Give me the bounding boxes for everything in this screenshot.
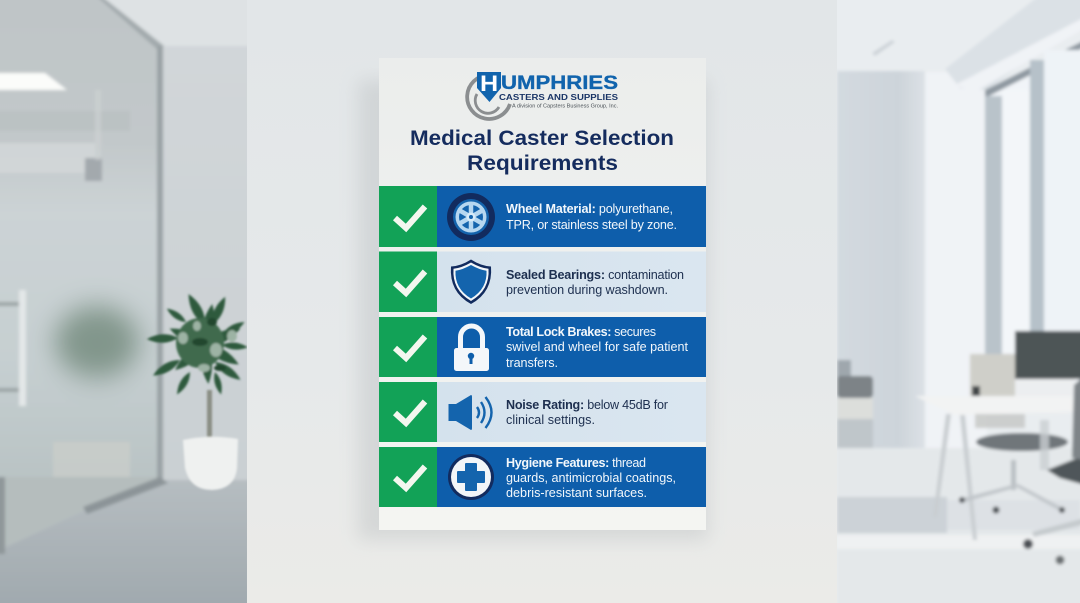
text: sealed bearings: Sealed Bearings: contamination <box>506 268 684 282</box>
logo: Humphries Casters and Supplies: UMPHRIES <box>501 73 618 94</box>
title: Requirements <box>467 152 618 175</box>
row: hygiene features <box>379 447 706 507</box>
logo: Humphries Casters and Supplies: A division of Capsters Business Group, Inc. <box>512 104 618 110</box>
icon: speaker <box>448 395 492 430</box>
text: noise rating <box>506 398 668 427</box>
logo: Humphries Casters and Supplies: H <box>480 72 498 97</box>
plant in white pot <box>147 292 248 490</box>
text: noise rating: clinical settings. <box>506 413 595 427</box>
row: noise rating <box>379 382 706 442</box>
text: sealed bearings <box>506 268 684 297</box>
title <box>410 127 674 175</box>
background: bright office on the right <box>835 0 1080 603</box>
poster panel <box>379 58 706 530</box>
icon: check mark <box>395 402 425 423</box>
text: sealed bearings: prevention during washdown. <box>506 283 668 297</box>
icon: padlock <box>454 326 489 371</box>
text: total lock brakes: transfers. <box>506 356 558 370</box>
icon: medical cross <box>448 454 494 500</box>
logo: Humphries Casters and Supplies: CASTERS AND SUPPLIES <box>499 92 618 102</box>
text: hygiene features: debris-resistant surfaces. <box>506 486 647 500</box>
icon: check mark <box>395 206 425 228</box>
row: wheel material <box>379 186 706 247</box>
icon: check mark <box>395 336 425 358</box>
text: hygiene features <box>506 456 676 500</box>
poster drop shadow <box>358 80 708 540</box>
row: total lock brakes <box>379 317 706 377</box>
icon: check mark <box>395 272 425 293</box>
icon: shield <box>451 260 491 304</box>
background: centre wall <box>247 0 837 603</box>
text: total lock brakes: swivel and wheel for safe patient <box>506 340 688 354</box>
icon: wheel <box>447 193 495 241</box>
background: glass door office on the left <box>0 0 250 603</box>
title: Medical Caster Selection <box>410 127 674 150</box>
text: wheel material: TPR, or stainless steel by zone. <box>506 218 677 232</box>
text: wheel material: Wheel Material: polyurethane, <box>506 202 673 216</box>
text: total lock brakes <box>506 325 688 370</box>
text: noise rating: Noise Rating: below 45dB for <box>506 398 668 412</box>
text: hygiene features: guards, antimicrobial coatings, <box>506 471 676 485</box>
text: wheel material <box>506 202 677 232</box>
text: total lock brakes: Total Lock Brakes: secures <box>506 325 656 339</box>
logo: Humphries Casters and Supplies <box>467 72 618 119</box>
icon: check mark <box>395 466 425 488</box>
row: sealed bearings <box>379 252 706 312</box>
text: hygiene features: Hygiene Features: thread <box>506 456 646 470</box>
